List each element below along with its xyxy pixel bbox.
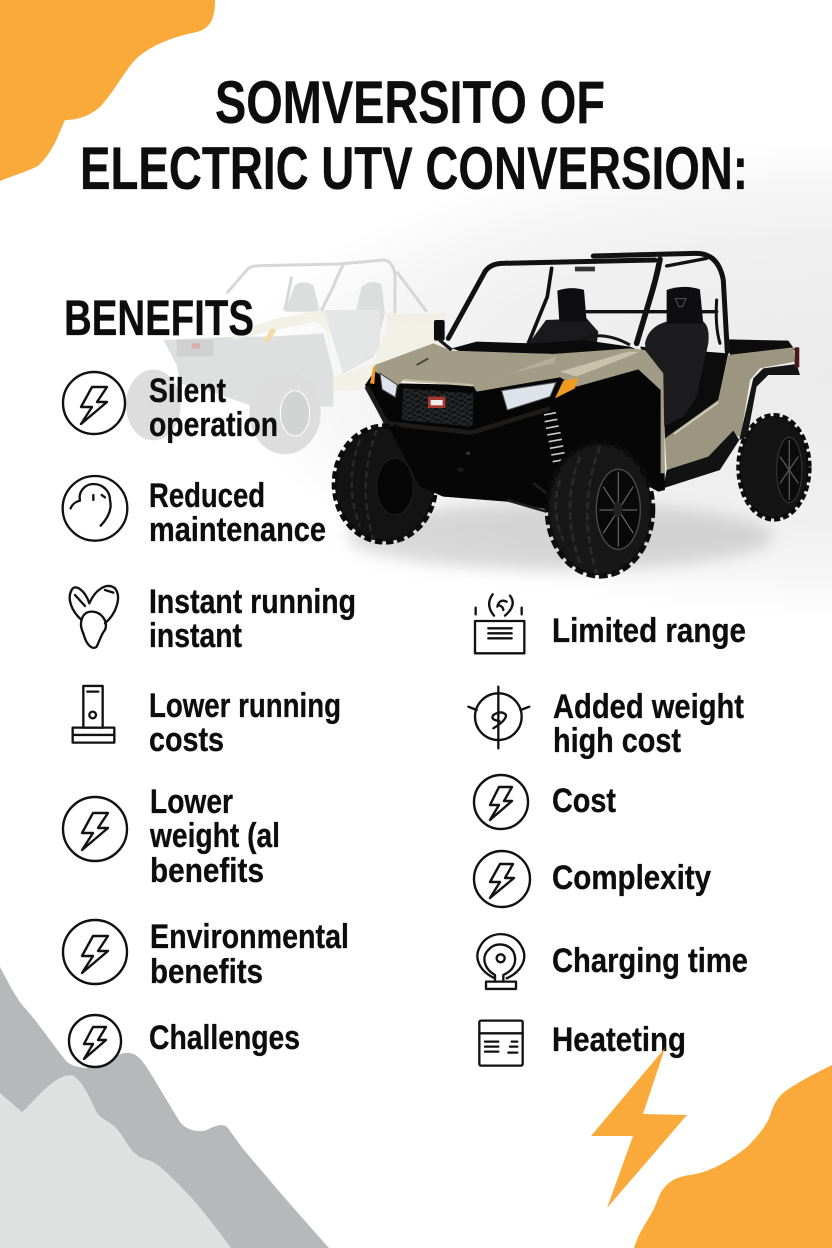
text: silent operation — [149, 372, 278, 444]
item: challenges — [69, 1015, 300, 1067]
background wash — [200, 140, 832, 620]
text: cost: Cost — [552, 782, 616, 820]
text: reduced maintenance — [149, 477, 326, 549]
rear right wheel — [739, 415, 809, 519]
icon: lightning circle — [63, 372, 125, 434]
benefit: environmental benefits — [63, 918, 349, 991]
mirror — [434, 320, 452, 350]
icon: lightning circle — [474, 851, 530, 907]
benefit: lower weight — [63, 783, 280, 890]
text: reduced maintenance: maintenance — [149, 511, 326, 549]
ghost left wheel — [126, 370, 181, 440]
text: lower weight benefits: benefits — [150, 852, 264, 890]
icon: heart shape — [70, 586, 118, 648]
ground shadow — [347, 503, 773, 570]
body over left wheel — [388, 427, 473, 497]
dash and cowl — [452, 340, 637, 354]
lower arm — [507, 483, 547, 512]
left seat — [528, 288, 598, 345]
text: environmental benefits: Environmental — [150, 918, 349, 956]
left headlight — [380, 373, 397, 397]
text: instant running: instant — [149, 617, 242, 655]
text: challenges: Challenges — [149, 1019, 300, 1057]
icon: lightning circle — [63, 797, 127, 861]
text: lower running costs: costs — [149, 721, 224, 759]
rear fender — [739, 364, 800, 440]
icon: panel — [479, 1021, 523, 1066]
mirror strip — [575, 267, 595, 271]
ghost cream body — [233, 310, 440, 392]
text: added weight high cost: high cost — [553, 722, 681, 760]
benefit: lower running costs — [73, 686, 341, 759]
steering wheel — [580, 336, 630, 345]
bumper — [367, 387, 550, 470]
text: added weight high cost: Added weight — [553, 688, 744, 726]
ghost roll cage — [227, 260, 427, 313]
tail light — [795, 347, 799, 367]
icon: lightning circle — [69, 1015, 121, 1067]
ghost rear bed — [387, 313, 447, 357]
benefit: silent operation — [63, 372, 278, 444]
grille badge — [428, 397, 445, 408]
main UTV illustration — [334, 253, 809, 576]
orange blob top left — [0, 0, 215, 181]
right seat — [645, 287, 709, 427]
text: instant running — [149, 583, 356, 655]
black chassis and fascia — [365, 367, 665, 510]
text: instant running: Instant running — [149, 583, 356, 621]
ghost rim — [280, 391, 310, 436]
ghost UTV in background — [126, 260, 447, 454]
ghost seats — [285, 282, 320, 312]
challenge: charging time — [477, 934, 748, 989]
benefit: instant running — [70, 583, 356, 655]
front left wheel — [334, 426, 436, 542]
text: reduced maintenance: Reduced — [149, 477, 265, 515]
text: lower running costs — [149, 687, 341, 759]
text: lower weight benefits: Lower — [150, 783, 233, 821]
text: heateting: Heateting — [552, 1021, 686, 1059]
text: complexity: Complexity — [552, 859, 711, 897]
icon: lightning circle — [63, 920, 127, 984]
challenge: complexity — [474, 851, 711, 907]
text: environmental benefits — [150, 918, 349, 991]
icon: orange lightning bolt — [591, 1048, 687, 1208]
icon: tower unit — [73, 686, 114, 743]
ghost body lower — [163, 333, 333, 407]
text: charging time: Charging time — [552, 942, 748, 980]
roll cage — [448, 253, 727, 352]
right indicator — [555, 378, 578, 398]
text: environmental benefits: benefits — [150, 953, 263, 991]
front right wheel — [547, 443, 653, 576]
door sill — [663, 431, 739, 488]
challenge: heateting — [479, 1021, 686, 1066]
grille — [402, 388, 473, 427]
icon: box with swirl — [475, 594, 524, 653]
grey mountains — [0, 967, 329, 1248]
icon: lightning circle — [474, 775, 528, 829]
ghost orange lamp — [263, 328, 277, 343]
ghost right wheel — [249, 371, 321, 454]
door highlight — [674, 402, 718, 434]
icon: ring charger — [477, 934, 524, 989]
left indicator — [370, 366, 376, 384]
text: lower running costs: Lower running — [149, 687, 341, 725]
rear bed — [728, 339, 795, 355]
door and rear body panel — [665, 347, 795, 470]
icon: target — [468, 687, 529, 748]
challenge: cost — [474, 775, 616, 829]
challenge: limited range — [475, 594, 746, 653]
text: limited range: Limited range — [552, 612, 746, 650]
title: SOMVERSITO OF — [215, 69, 605, 136]
ghost badge — [192, 343, 200, 349]
heading: benefits: BENEFITS — [64, 290, 254, 346]
icon: blob face circle — [63, 476, 127, 541]
text: lower weight benefits — [149, 783, 280, 890]
orange blob bottom right — [634, 1065, 832, 1248]
text: silent operation: Silent — [149, 372, 226, 410]
text: lower weight benefits: weight (al — [149, 817, 280, 855]
right headlight — [502, 382, 556, 410]
light mountain — [0, 1075, 231, 1248]
text: silent operation: operation — [149, 406, 278, 444]
title — [80, 69, 748, 202]
dark mountain — [0, 967, 329, 1248]
coil spring — [544, 413, 566, 462]
hood — [375, 343, 665, 473]
challenge: added weight high cost — [468, 687, 744, 760]
cockpit interior — [640, 347, 728, 440]
text: added weight high cost — [553, 688, 744, 760]
benefit: reduced maintenance — [63, 476, 326, 549]
ghost grille — [177, 340, 213, 357]
